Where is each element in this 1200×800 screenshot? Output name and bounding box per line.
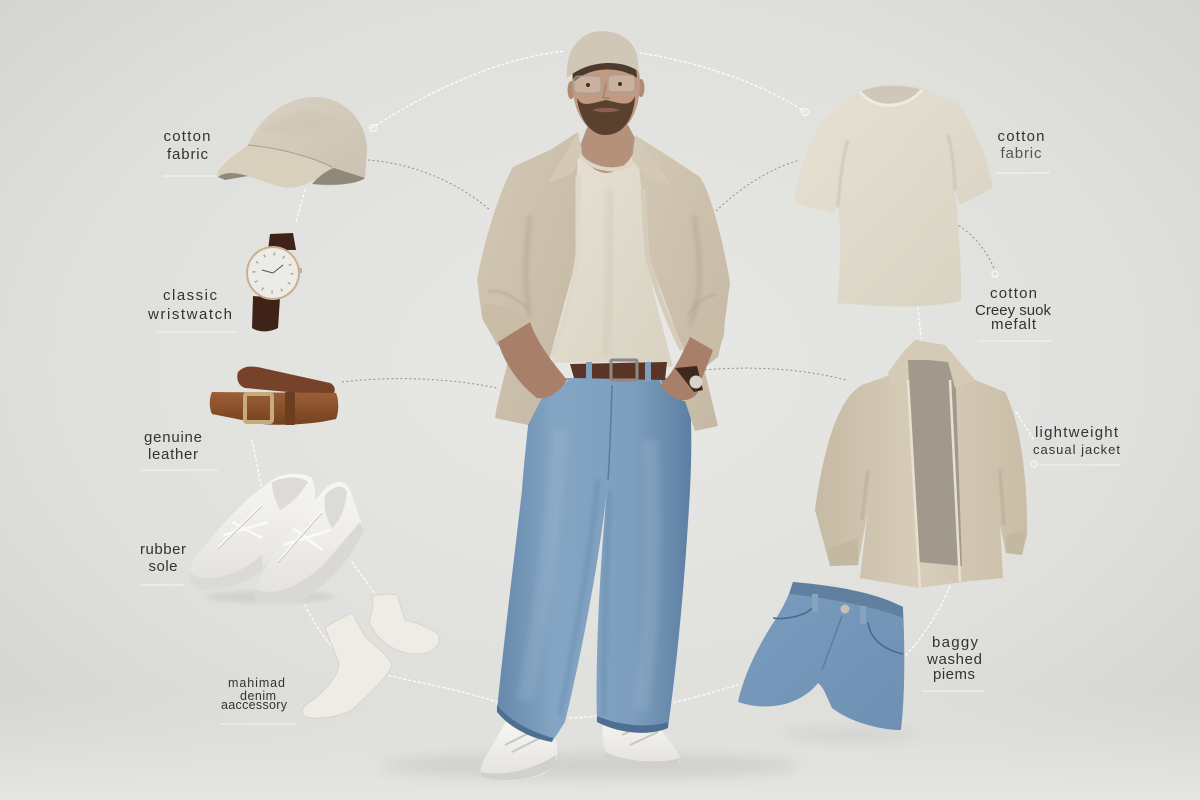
- label: genuine leather: leather: [148, 446, 198, 463]
- shoes: [481, 716, 680, 780]
- label: cotton creey suok mefalt: cotton: [990, 285, 1037, 302]
- neck: [580, 125, 637, 173]
- item: white sneakers: [190, 474, 364, 604]
- label: cotton creey suok mefalt: Creey suok: [975, 302, 1052, 319]
- tee collar: [578, 152, 640, 169]
- item: baseball cap: [217, 97, 367, 188]
- label: lightweight casual jacket: lightweight: [1035, 424, 1119, 441]
- label: cotton fabric (tee): fabric: [1000, 145, 1042, 162]
- label: denim accessory: denim: [240, 689, 276, 703]
- jacket: [477, 132, 730, 431]
- label: denim accessory: mahimad: [228, 676, 285, 690]
- face: [567, 31, 644, 135]
- label: cotton fabric (cap): cotton: [164, 128, 210, 145]
- person: [477, 31, 730, 780]
- label: baggy washed piems: [922, 634, 984, 691]
- label: classic wristwatch: [147, 287, 238, 332]
- label: rubber sole: rubber: [140, 541, 186, 558]
- label: cotton creey suok mefalt: mefalt: [991, 316, 1037, 333]
- label: denim accessory: [220, 676, 297, 724]
- label: rubber sole: [140, 541, 186, 585]
- item: leather belt: [210, 367, 338, 425]
- item: casual jacket: [815, 340, 1027, 588]
- hands and forearms: [498, 322, 713, 400]
- label: classic wristwatch: classic: [163, 287, 218, 304]
- belt and watch: [570, 360, 703, 392]
- label: baggy washed piems: baggy: [932, 634, 978, 651]
- label: cotton fabric (tee): cotton: [998, 128, 1044, 145]
- label: cotton fabric (cap): [163, 128, 215, 176]
- dotted connector lines: [252, 51, 1037, 718]
- label: genuine leather: genuine: [144, 429, 202, 446]
- label: rubber sole: sole: [148, 558, 178, 575]
- label: cotton creey suok mefalt: [975, 285, 1052, 341]
- label: lightweight casual jacket: casual jacket: [1033, 442, 1120, 457]
- item: white socks: [302, 594, 439, 718]
- label: baggy washed piems: washed: [926, 651, 982, 668]
- t-shirt: [552, 150, 673, 367]
- label: baggy washed piems: piems: [933, 666, 975, 683]
- label: denim accessory: aaccessory: [221, 698, 288, 712]
- item: wristwatch: [246, 233, 302, 331]
- label: lightweight casual jacket: [1033, 424, 1120, 465]
- item: t-shirt: [794, 84, 993, 306]
- label: classic wristwatch: wristwatch: [147, 306, 232, 323]
- label: cotton fabric (tee): [995, 128, 1050, 173]
- label: cotton fabric (cap): fabric: [167, 146, 208, 163]
- jeans: [497, 378, 691, 742]
- label: genuine leather: [141, 429, 218, 470]
- item: denim shorts: [738, 582, 904, 730]
